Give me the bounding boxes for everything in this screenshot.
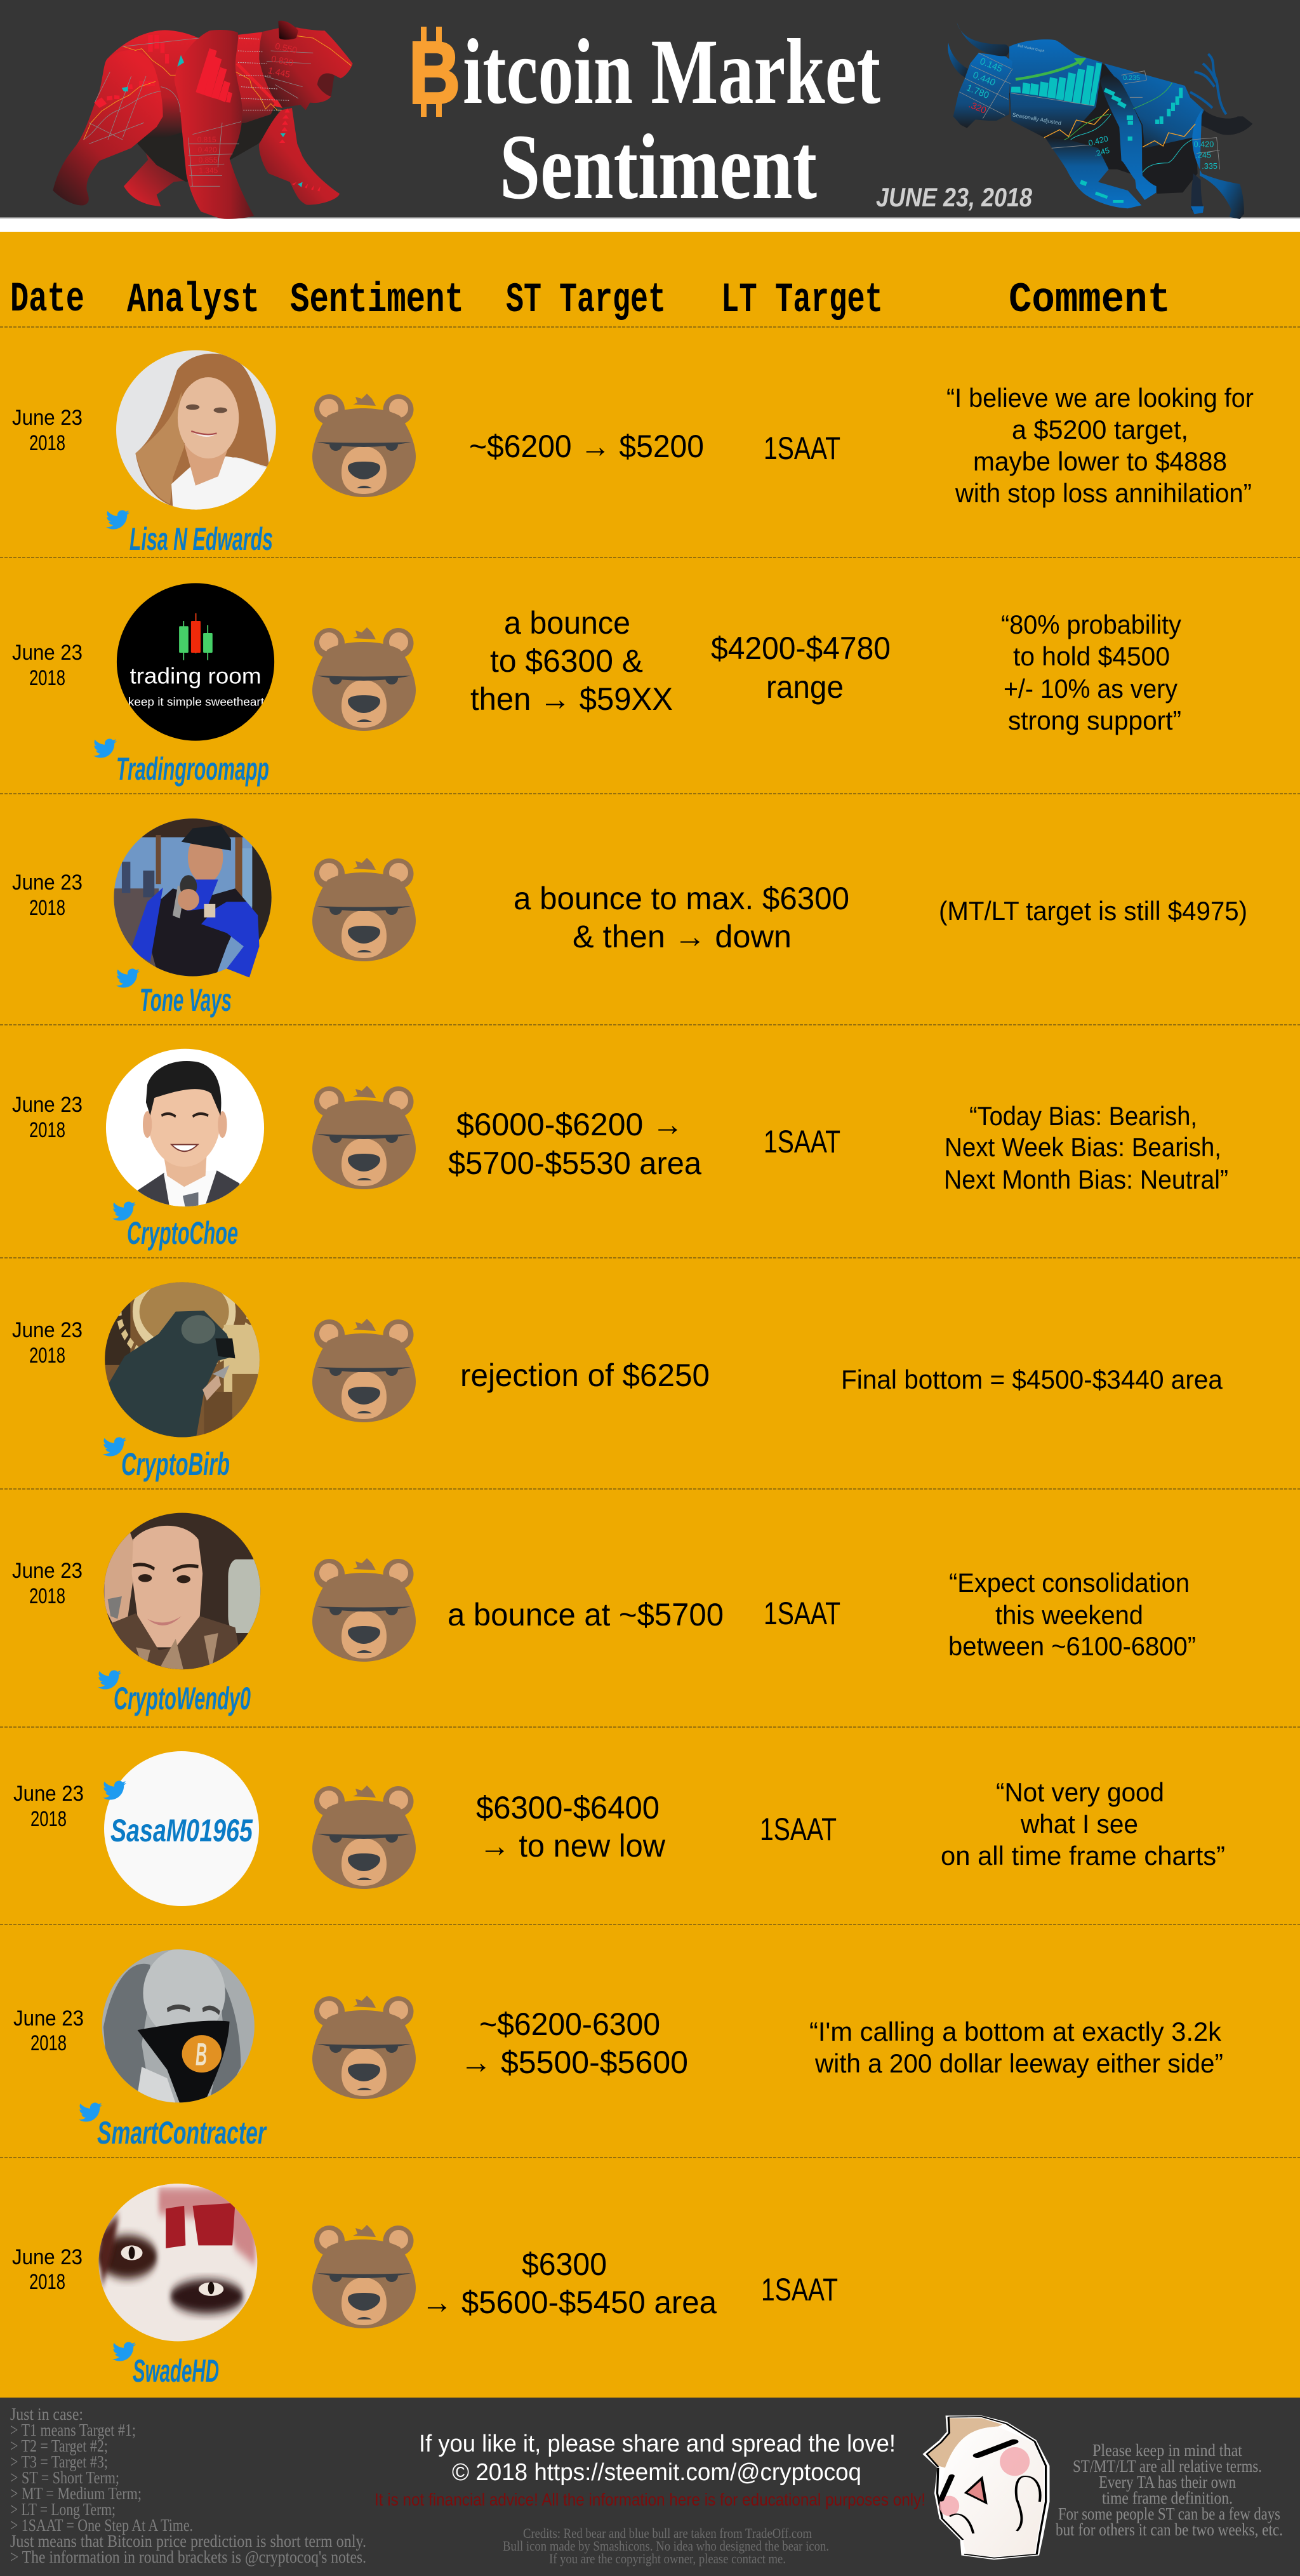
footer: time frame note: ST/MT/LT are all relative terms. [1073,2457,1262,2476]
ST target: $6000-$6200 → [456,1107,684,1142]
row: SmartContracter [13,1948,1223,2151]
twitter bird [106,510,129,529]
sentiment bear [312,1996,416,2099]
ST target [514,881,849,954]
LT target: 1SAAT [760,1812,837,1847]
icon: blue bull: 1.780 [965,83,990,101]
footer: glossary: > The information in round brackets is @cryptocoq's notes. [10,2547,366,2566]
analyst avatar [114,580,277,742]
footer: glossary: > MT = Medium Term; [10,2484,142,2503]
twitter bird [103,1437,126,1456]
LT target: 1SAAT [764,430,840,466]
date [13,2006,84,2055]
footer: credits: Bull icon made by Smashicons. No idea who designed the bear icon. [503,2538,829,2554]
icon: blue bull: 0.420 [1087,134,1109,148]
row: CryptoChoe [12,1046,1228,1251]
sentiment bear [312,1558,416,1662]
row: Tone Vays [12,817,1247,1018]
icon: cartoon mascot [924,2416,1049,2559]
twitter bird [103,1780,126,1799]
table header: ST Target [506,276,666,324]
comment: “80% probability [1001,610,1181,639]
icon: blue bull: .245 [1093,146,1111,159]
date: 2018 [29,2270,65,2294]
analyst avatar: trading room [129,664,262,689]
twitter bird [112,2342,136,2361]
comment: with stop loss annihilation” [955,478,1252,508]
date [12,1093,83,1142]
handle: Lisa N Edwards [129,521,273,557]
ST target: → $5600-$5450 area [421,2285,717,2320]
icon: red bear: 1.345 [199,166,218,175]
comment [944,1101,1228,1194]
ST target: then → $59XX [470,681,673,717]
handle: Tradingroomapp [116,751,269,787]
analyst avatar [105,1282,260,1438]
footer: credits: Credits: Red bear and blue bull are taken from TradeOff.com [523,2525,812,2541]
comment: between ~6100-6800” [948,1631,1196,1661]
date [13,1782,84,1831]
ST target [476,1790,666,1864]
comment: a $5200 target, [1012,415,1188,444]
comment: strong support” [1008,705,1181,735]
LT target: 1SAAT [764,1596,840,1631]
comment [941,1777,1225,1871]
row: CryptoBirb [13,1282,1223,1482]
date: June 23 [13,1782,84,1806]
date: 2018 [29,431,65,455]
ST target [448,1107,701,1181]
icon: blue bull: Seasonally Adjusted [1012,111,1062,126]
ST target: to $6300 & [490,643,643,679]
icon: red bear: 1.445 [267,65,291,79]
comment [809,2017,1223,2078]
title [409,20,880,218]
date: June 23 [12,2245,83,2269]
analyst avatar [104,1751,259,1906]
sentiment bear [312,858,416,961]
ST target: rejection of $6250 [460,1358,710,1393]
icon: red bear: 0.820 [270,53,295,68]
comment: to hold $4500 [1013,641,1170,671]
row: SasaM01965 [13,1751,1225,1906]
comment: with a 200 dollar leeway either side” [814,2048,1223,2078]
footer: glossary: > LT = Long Term; [10,2500,116,2519]
ST target: → to new low [479,1828,666,1864]
twitter bird [79,2102,102,2121]
footer: glossary: > 1SAAT = One Step At A Time. [10,2516,193,2535]
sentiment bear [312,1785,416,1889]
analyst avatar [100,1948,256,2107]
sentiment bear [312,394,416,497]
icon: red bear: 0.855 [199,156,218,164]
footer: glossary: > T3 = Target #3; [10,2452,108,2471]
footer: glossary: > T2 = Target #2; [10,2436,108,2455]
date: June 23 [12,1559,83,1583]
icon: blue bull [948,22,1252,219]
footer: share call to action: If you like it, please share and spread the love! [419,2431,896,2457]
analyst avatar [98,2182,259,2344]
comment: “I'm calling a bottom at exactly 3.2k [809,2017,1222,2046]
date: June 23 [12,406,83,430]
handle: Tone Vays [140,982,232,1018]
date stamp: JUNE 23, 2018 [876,182,1033,212]
footer: glossary: Just in case: [10,2405,83,2424]
date [12,1559,83,1608]
date: June 23 [12,1093,83,1117]
row: Lisa N Edwards [12,349,1254,557]
ST target: ~$6200-6300 [479,2006,660,2042]
comment: “Expect consolidation [949,1568,1190,1598]
comment: Final bottom = $4500-$3440 area [841,1365,1223,1394]
analyst avatar [114,817,272,978]
ST target: & then → down [573,919,792,954]
date: June 23 [12,1318,83,1342]
analyst avatar: keep it simple sweetheart [128,695,264,708]
analyst avatar [102,1511,263,1676]
header background [0,0,1300,218]
icon: red bear: 0.550 [274,41,298,55]
icon: blue bull: .320 [967,100,988,116]
footer: share call to action: © 2018 https://steemit.com/@cryptocoq [452,2459,861,2486]
analyst avatar [114,349,277,513]
footer: credits [503,2525,829,2566]
LT target: $4200-$4780 [711,631,891,666]
footer: time frame note: Every TA has their own [1099,2473,1236,2492]
row: SwadeHD [12,2182,838,2389]
comment: on all time frame charts” [941,1841,1225,1871]
date: 2018 [29,666,65,690]
handle: CryptoWendy0 [114,1681,251,1716]
handle: SasaM01965 [110,1813,253,1848]
LT target: range [766,669,844,705]
footer: disclaimer: It is not financial advice! All the information here is for educational purposes only! [375,2490,925,2509]
footer: time frame note [1056,2441,1283,2539]
LT target [711,631,891,705]
footer: glossary: > T1 means Target #1; [10,2420,136,2439]
date [12,641,83,690]
ST target: ~$6200 → $5200 [469,429,704,464]
table header: Date [10,276,84,323]
date: 2018 [29,1584,65,1608]
twitter bird [93,738,117,757]
footer: glossary [10,2405,366,2566]
footer: share call to action [419,2431,896,2486]
ST target: $6300-$6400 [476,1790,660,1825]
handle: CryptoBirb [121,1446,230,1482]
title: itcoin Market [463,20,880,123]
date: June 23 [12,641,83,665]
comment [946,383,1254,508]
footer: time frame note: time frame definition. [1102,2488,1233,2507]
comment [948,1568,1196,1661]
date: 2018 [30,1807,67,1831]
table header: Sentiment [290,276,464,324]
comment: “Not very good [996,1777,1164,1807]
ST target [460,2006,688,2080]
twitter bird [98,1670,121,1689]
comment: maybe lower to $4888 [973,446,1227,476]
icon: blue bull: 0.235 [1123,74,1140,82]
icon: blue bull: Bull Market Graph [1018,44,1045,53]
comment: Next Week Bias: Bearish, [945,1132,1221,1162]
comment: “I believe we are looking for [946,383,1254,413]
comment: Next Month Bias: Neutral” [944,1165,1228,1194]
twitter bird [112,1201,136,1220]
comment [1001,610,1181,735]
ST target: a bounce to max. $6300 [514,881,849,916]
row: CryptoWendy0 [12,1511,1196,1716]
ST target: a bounce at ~$5700 [448,1597,724,1632]
sentiment bear [312,627,416,731]
bitcoin logo letter: B [409,24,460,122]
analyst avatar: B [196,2037,207,2072]
footer: glossary: > ST = Short Term; [10,2468,119,2487]
date [12,1318,83,1368]
icon: blue bull: 0.440 [971,70,997,88]
footer: time frame note: Please keep in mind that [1092,2441,1242,2460]
handle: SwadeHD [133,2353,219,2389]
footer: glossary: Just means that Bitcoin price prediction is short term only. [10,2532,366,2551]
row: Tradingroomapp [12,580,1181,787]
handle: CryptoChoe [127,1215,238,1251]
analyst avatar [105,1046,267,1209]
comment: “Today Bias: Bearish, [969,1101,1197,1131]
comment: (MT/LT target is still $4975) [939,896,1247,926]
comment: what I see [1020,1809,1138,1839]
handle: SmartContracter [97,2115,267,2151]
footer background [0,2398,1300,2576]
icon: red bear [53,21,353,219]
icon: red bear: 0.815 [197,135,216,144]
ST target: a bounce [504,605,630,641]
date [12,871,83,920]
ST target: → $5500-$5600 [460,2045,688,2080]
date [12,406,83,455]
icon: blue bull: 0.420 [1194,140,1214,149]
ST target [421,2246,717,2320]
icon: red bear: 0.420 [198,145,217,154]
table header: Analyst [127,276,260,324]
table header [10,276,1171,324]
sentiment bear [312,2225,416,2328]
icon: blue bull: 0.145 [978,57,1004,74]
table header: Comment [1009,276,1171,324]
icon: blue bull: .335 [1202,162,1217,171]
date: 2018 [29,1118,65,1142]
twitter bird [116,968,140,987]
title: Sentiment [500,115,817,218]
ST target: $5700-$5530 area [448,1145,701,1181]
sentiment bear [312,1319,416,1422]
LT target: 1SAAT [764,1124,840,1159]
ST target [470,605,673,717]
icon: blue bull: .245 [1195,150,1211,159]
date: 2018 [29,896,65,920]
date: June 23 [13,2006,84,2031]
sentiment bear [312,1086,416,1189]
date: 2018 [29,1344,65,1368]
LT target: 1SAAT [761,2272,838,2307]
date: 2018 [30,2031,67,2055]
comment: +/- 10% as very [1004,674,1177,704]
date [12,2245,83,2294]
date: June 23 [12,871,83,895]
ST target: $6300 [522,2246,607,2282]
table header: LT Target [721,276,883,324]
footer: credits: If you are the copyright owner, please contact me. [549,2551,786,2566]
comment: this weekend [995,1600,1143,1630]
